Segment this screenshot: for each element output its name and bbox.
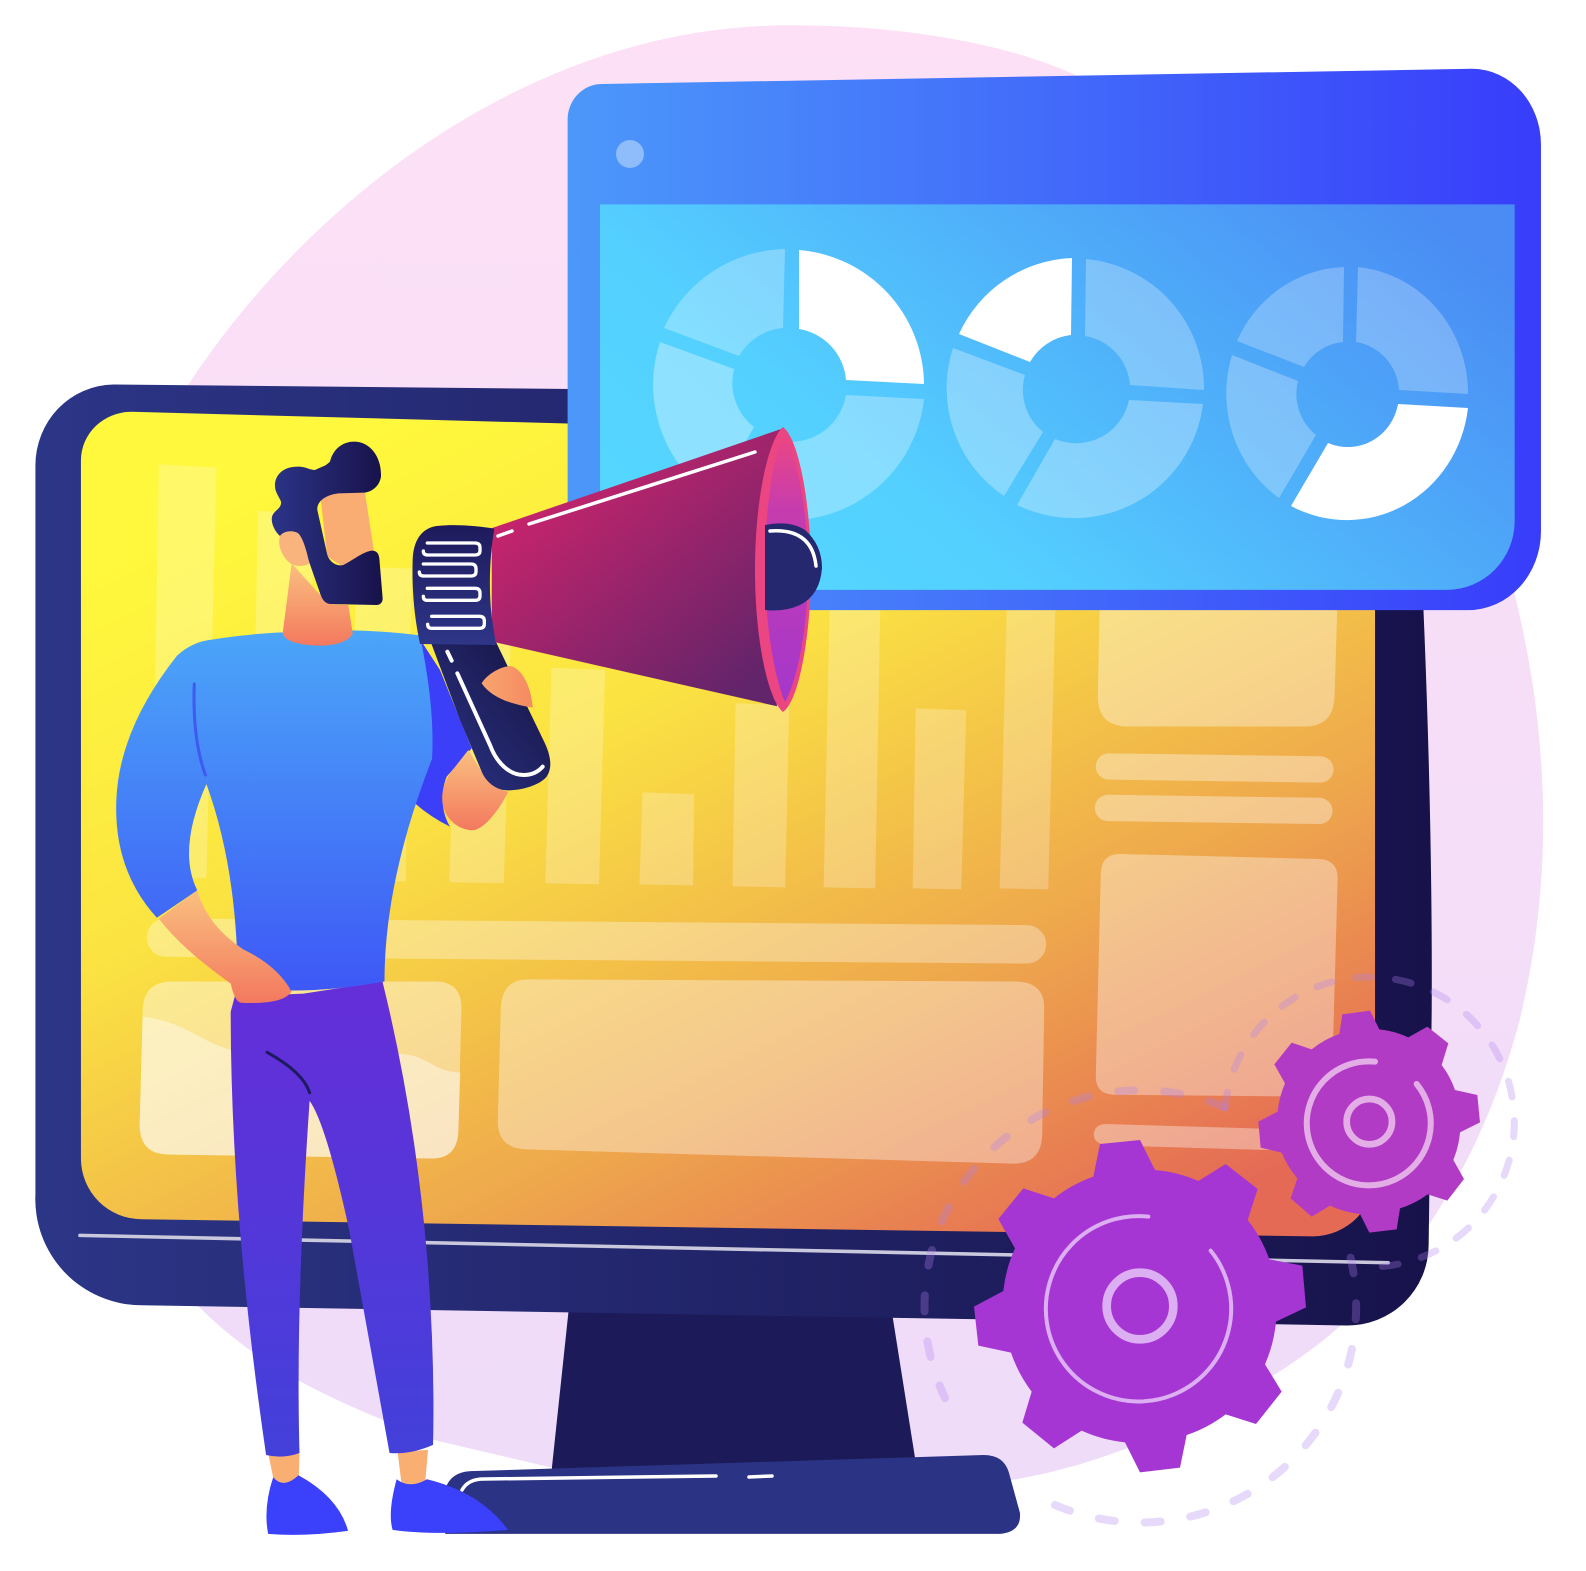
background blob bbox=[187, 25, 1543, 1492]
screen panel with wave chart bbox=[140, 981, 461, 1159]
megaphone mouth bbox=[765, 434, 808, 702]
monitor stand bbox=[551, 1310, 916, 1472]
keyboard highlight bbox=[462, 1476, 772, 1490]
shoes bbox=[266, 1475, 508, 1535]
head bbox=[272, 442, 383, 646]
small gear bbox=[1258, 1011, 1480, 1233]
neck bbox=[283, 563, 353, 646]
dashboard window bbox=[568, 69, 1541, 610]
knob highlight bbox=[770, 531, 816, 566]
hand on hip arm bbox=[159, 890, 291, 1003]
monitor bbox=[35, 384, 1432, 1534]
face bbox=[320, 493, 374, 567]
megaphone rear cylinder bbox=[412, 525, 496, 645]
screen bar chart bbox=[152, 464, 1055, 889]
megaphone handle highlights bbox=[447, 652, 543, 775]
donut chart three bbox=[1226, 267, 1468, 520]
screen wide panel bbox=[498, 979, 1044, 1164]
megaphone bbox=[412, 427, 822, 790]
forearm bbox=[442, 750, 508, 830]
megaphone rim bbox=[755, 427, 811, 712]
megaphone slots bbox=[419, 543, 484, 628]
monitor frame bbox=[35, 384, 1432, 1325]
sleeve crease bbox=[194, 684, 205, 775]
fingers bbox=[482, 666, 533, 708]
ear bbox=[279, 531, 309, 566]
monitor highlight line bbox=[80, 1235, 1388, 1263]
screen lower right panel bbox=[1096, 854, 1338, 1097]
megaphone knob bbox=[765, 523, 822, 610]
pants bbox=[231, 981, 433, 1457]
ankles bbox=[268, 1450, 428, 1487]
shirt bbox=[116, 630, 433, 991]
keyboard base bbox=[445, 1455, 1020, 1534]
megaphone cone highlight bbox=[498, 452, 755, 536]
pants crease bbox=[267, 1052, 310, 1093]
megaphone cone bbox=[492, 429, 781, 706]
big gear bbox=[974, 1140, 1306, 1472]
donut chart one bbox=[653, 249, 924, 520]
monitor screen bbox=[81, 412, 1375, 1236]
donut chart two bbox=[947, 258, 1204, 518]
screen long bar bbox=[147, 918, 1046, 964]
window dot bbox=[616, 140, 644, 168]
dashed orbit around big gear bbox=[925, 1090, 1356, 1522]
megaphone handle bbox=[430, 640, 550, 790]
dashed orbit around small gear bbox=[1225, 977, 1514, 1267]
screen text lines bbox=[1094, 753, 1334, 1151]
back arm sleeve bbox=[415, 637, 472, 827]
window body bbox=[600, 204, 1515, 590]
hair and beard bbox=[272, 442, 383, 605]
person bbox=[116, 442, 508, 1535]
window frame bbox=[568, 69, 1541, 610]
screen top right panel bbox=[1098, 597, 1338, 726]
